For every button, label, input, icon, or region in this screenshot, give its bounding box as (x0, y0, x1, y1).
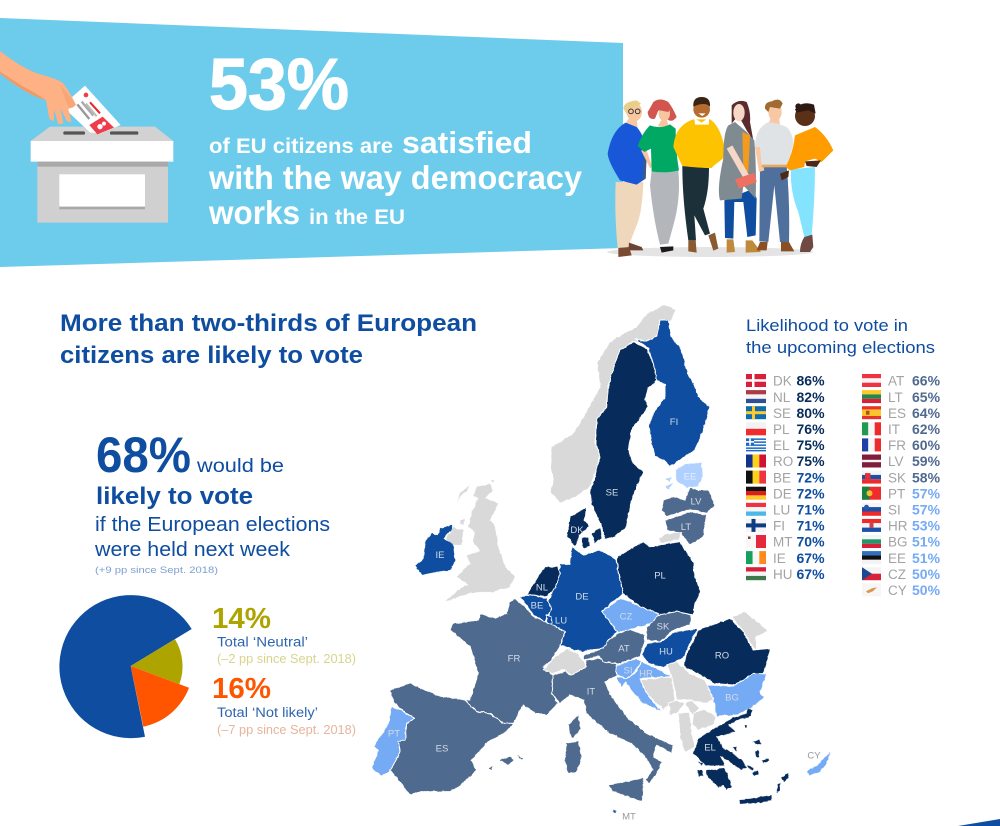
row CY: 50% (912, 582, 941, 598)
row MT (746, 534, 825, 550)
map shapes (372, 305, 830, 813)
legend: not likely: (–7 pp since Sept. 2018) (217, 723, 356, 737)
map country labels: CZ (620, 612, 633, 622)
row FR: 60% (912, 437, 941, 453)
row CZ: CZ (888, 567, 906, 582)
row BG (862, 534, 941, 550)
map country labels: RO (715, 650, 729, 662)
row HR: 53% (912, 518, 941, 534)
heading: likely to vote (60, 310, 477, 369)
row CY (862, 582, 941, 598)
row PL: PL (773, 422, 790, 437)
map country labels: NL (536, 582, 548, 594)
row AT: 66% (912, 373, 941, 389)
text block: 68% would be likely to vote: (+9 pp since Sept. 2018) (95, 565, 218, 576)
row HU (746, 566, 825, 582)
text block: 68% would be likely to vote: if the European elections (95, 514, 330, 536)
row LT (862, 389, 941, 405)
map country labels: EL (704, 742, 716, 754)
legend heading (746, 317, 935, 357)
row HU: 67% (796, 566, 825, 582)
row PL (746, 421, 825, 437)
map country labels: DK (570, 525, 584, 536)
row FI: 71% (796, 518, 825, 534)
row DE: 72% (796, 485, 825, 501)
row LV: 59% (912, 453, 941, 469)
row HR: HR (888, 519, 908, 534)
row ES (862, 405, 941, 421)
text block: 68% would be likely to vote: were held next week (94, 539, 291, 561)
heading: likely to vote: More than two-thirds of European (60, 310, 477, 337)
row EL (746, 437, 825, 453)
legend: not likely: Total ‘Not likely’ (217, 705, 318, 720)
row ES: 64% (912, 405, 941, 421)
row LV (862, 453, 941, 469)
row EE (862, 550, 941, 566)
map country labels: PL (654, 570, 666, 582)
map country labels (388, 417, 821, 822)
Greece and islands (693, 708, 788, 804)
corner accent (958, 819, 1000, 826)
row FI (746, 518, 825, 534)
map country labels: AT (618, 644, 630, 654)
row EE: 51% (912, 550, 941, 566)
map country labels: CY (807, 750, 821, 762)
row IE: 67% (796, 550, 825, 566)
person 2 (638, 99, 679, 253)
row PT (862, 485, 941, 501)
map country labels: IE (436, 550, 444, 561)
row NL (746, 389, 825, 405)
map country labels: HR (639, 668, 653, 680)
row NL: 82% (796, 389, 825, 405)
headline text: satisfied (402, 125, 532, 160)
legend heading: the upcoming elections (746, 339, 935, 357)
row ES: ES (888, 406, 906, 421)
headline text: in the EU (309, 206, 405, 229)
text block: 68% would be likely to vote: would be (196, 455, 284, 477)
legend heading: Likelihood to vote in (746, 317, 908, 335)
map country labels: BE (531, 600, 543, 612)
row RO: 75% (796, 453, 825, 469)
British Isles (415, 479, 515, 602)
row SK: 58% (912, 469, 941, 485)
row FR: FR (888, 438, 906, 453)
illustration: group of six citizens (607, 97, 833, 257)
row DK: 86% (796, 373, 825, 389)
row MT: MT (773, 535, 792, 550)
person 1 (608, 100, 647, 257)
row PL: 76% (796, 421, 825, 437)
row SI: SI (888, 502, 901, 517)
text block: 68% would be likely to vote (94, 427, 330, 576)
map country labels: PT (388, 728, 400, 740)
row BE: 72% (796, 469, 825, 485)
map country labels: SI (624, 666, 632, 676)
row SE (746, 405, 825, 421)
headline text: of EU citizens are (209, 135, 393, 158)
row LT: LT (888, 390, 903, 405)
icon: ballot box with hand (0, 51, 173, 223)
row EL: 75% (796, 437, 825, 453)
row PT: 57% (912, 485, 941, 501)
row SE: 80% (796, 405, 825, 421)
row LT: 65% (912, 389, 941, 405)
headline text (208, 125, 583, 231)
legend: neutral: 14% (212, 603, 271, 635)
map country labels: DE (575, 592, 589, 602)
map country labels: LV (691, 496, 702, 508)
row LU (746, 502, 825, 518)
row SK: SK (888, 470, 906, 485)
map country labels: IT (587, 686, 595, 698)
row FI: FI (773, 519, 785, 534)
row BE (746, 469, 825, 485)
heading: likely to vote: citizens are likely to vote (60, 342, 363, 369)
Nordic and Baltic countries (550, 305, 715, 548)
row SI: 57% (912, 501, 941, 517)
country list: right column (862, 373, 941, 598)
row LV: LV (888, 454, 904, 469)
row LU: LU (773, 502, 790, 517)
row AT (862, 373, 941, 389)
row LU: 71% (796, 501, 825, 517)
row SK (862, 469, 941, 485)
text block: 68% would be likely to vote: likely to vote (96, 483, 253, 510)
legend: not likely (212, 673, 356, 737)
row EL: EL (773, 438, 790, 453)
row BG: 51% (912, 534, 941, 550)
row AT: AT (888, 374, 904, 389)
row MT: 70% (796, 534, 825, 550)
map of Europe (372, 305, 830, 822)
row NL: NL (773, 390, 791, 405)
person 5 (755, 100, 794, 251)
row RO (746, 453, 825, 469)
row HU: HU (773, 567, 792, 582)
row RO: RO (773, 454, 793, 469)
row IT (862, 421, 941, 437)
row IE (746, 550, 825, 566)
row IE: IE (773, 551, 786, 566)
row BE: BE (773, 470, 791, 485)
legend: neutral: Total ‘Neutral’ (217, 634, 308, 650)
legend: neutral: (–2 pp since Sept. 2018) (217, 652, 356, 666)
map country labels: BG (725, 692, 739, 704)
legend: not likely: 16% (212, 673, 271, 705)
map country labels: ES (436, 744, 448, 754)
row HR (862, 518, 941, 534)
person 6 (780, 103, 833, 252)
map country labels: EE (684, 472, 696, 482)
person 4 (719, 101, 761, 253)
headline number: 53% (209, 45, 349, 125)
row BG: BG (888, 535, 908, 550)
headline text: works (208, 194, 300, 231)
row SI (862, 502, 941, 518)
row PT: PT (888, 486, 905, 501)
pie chart (59, 595, 192, 738)
row DK: DK (773, 374, 792, 389)
map country labels: FR (508, 654, 520, 664)
map country labels: SE (606, 488, 618, 498)
row IT: IT (888, 422, 900, 437)
row CZ (862, 566, 941, 582)
row EE: EE (888, 551, 906, 566)
map country labels: LU (555, 616, 567, 626)
row DK (746, 373, 825, 389)
country list: left column (746, 373, 825, 582)
row IT: 62% (912, 421, 941, 437)
row CY: CY (888, 583, 907, 598)
map country labels: LT (681, 522, 691, 533)
map country labels: MT (622, 812, 636, 822)
row CZ: 50% (912, 566, 941, 582)
row DE (746, 485, 825, 501)
legend: neutral (212, 603, 356, 666)
map country labels: HU (659, 646, 673, 658)
panel: headline banner (0, 18, 623, 267)
headline text: with the way democracy (208, 159, 583, 196)
row FR (862, 437, 941, 453)
row DE: DE (773, 486, 792, 501)
central and southern countries (372, 542, 830, 813)
text block: 68% would be likely to vote: 68% (96, 427, 191, 483)
map country labels: FI (670, 417, 678, 428)
person 3 (673, 97, 725, 253)
map country labels: SK (657, 622, 670, 632)
row SE: SE (773, 406, 791, 421)
